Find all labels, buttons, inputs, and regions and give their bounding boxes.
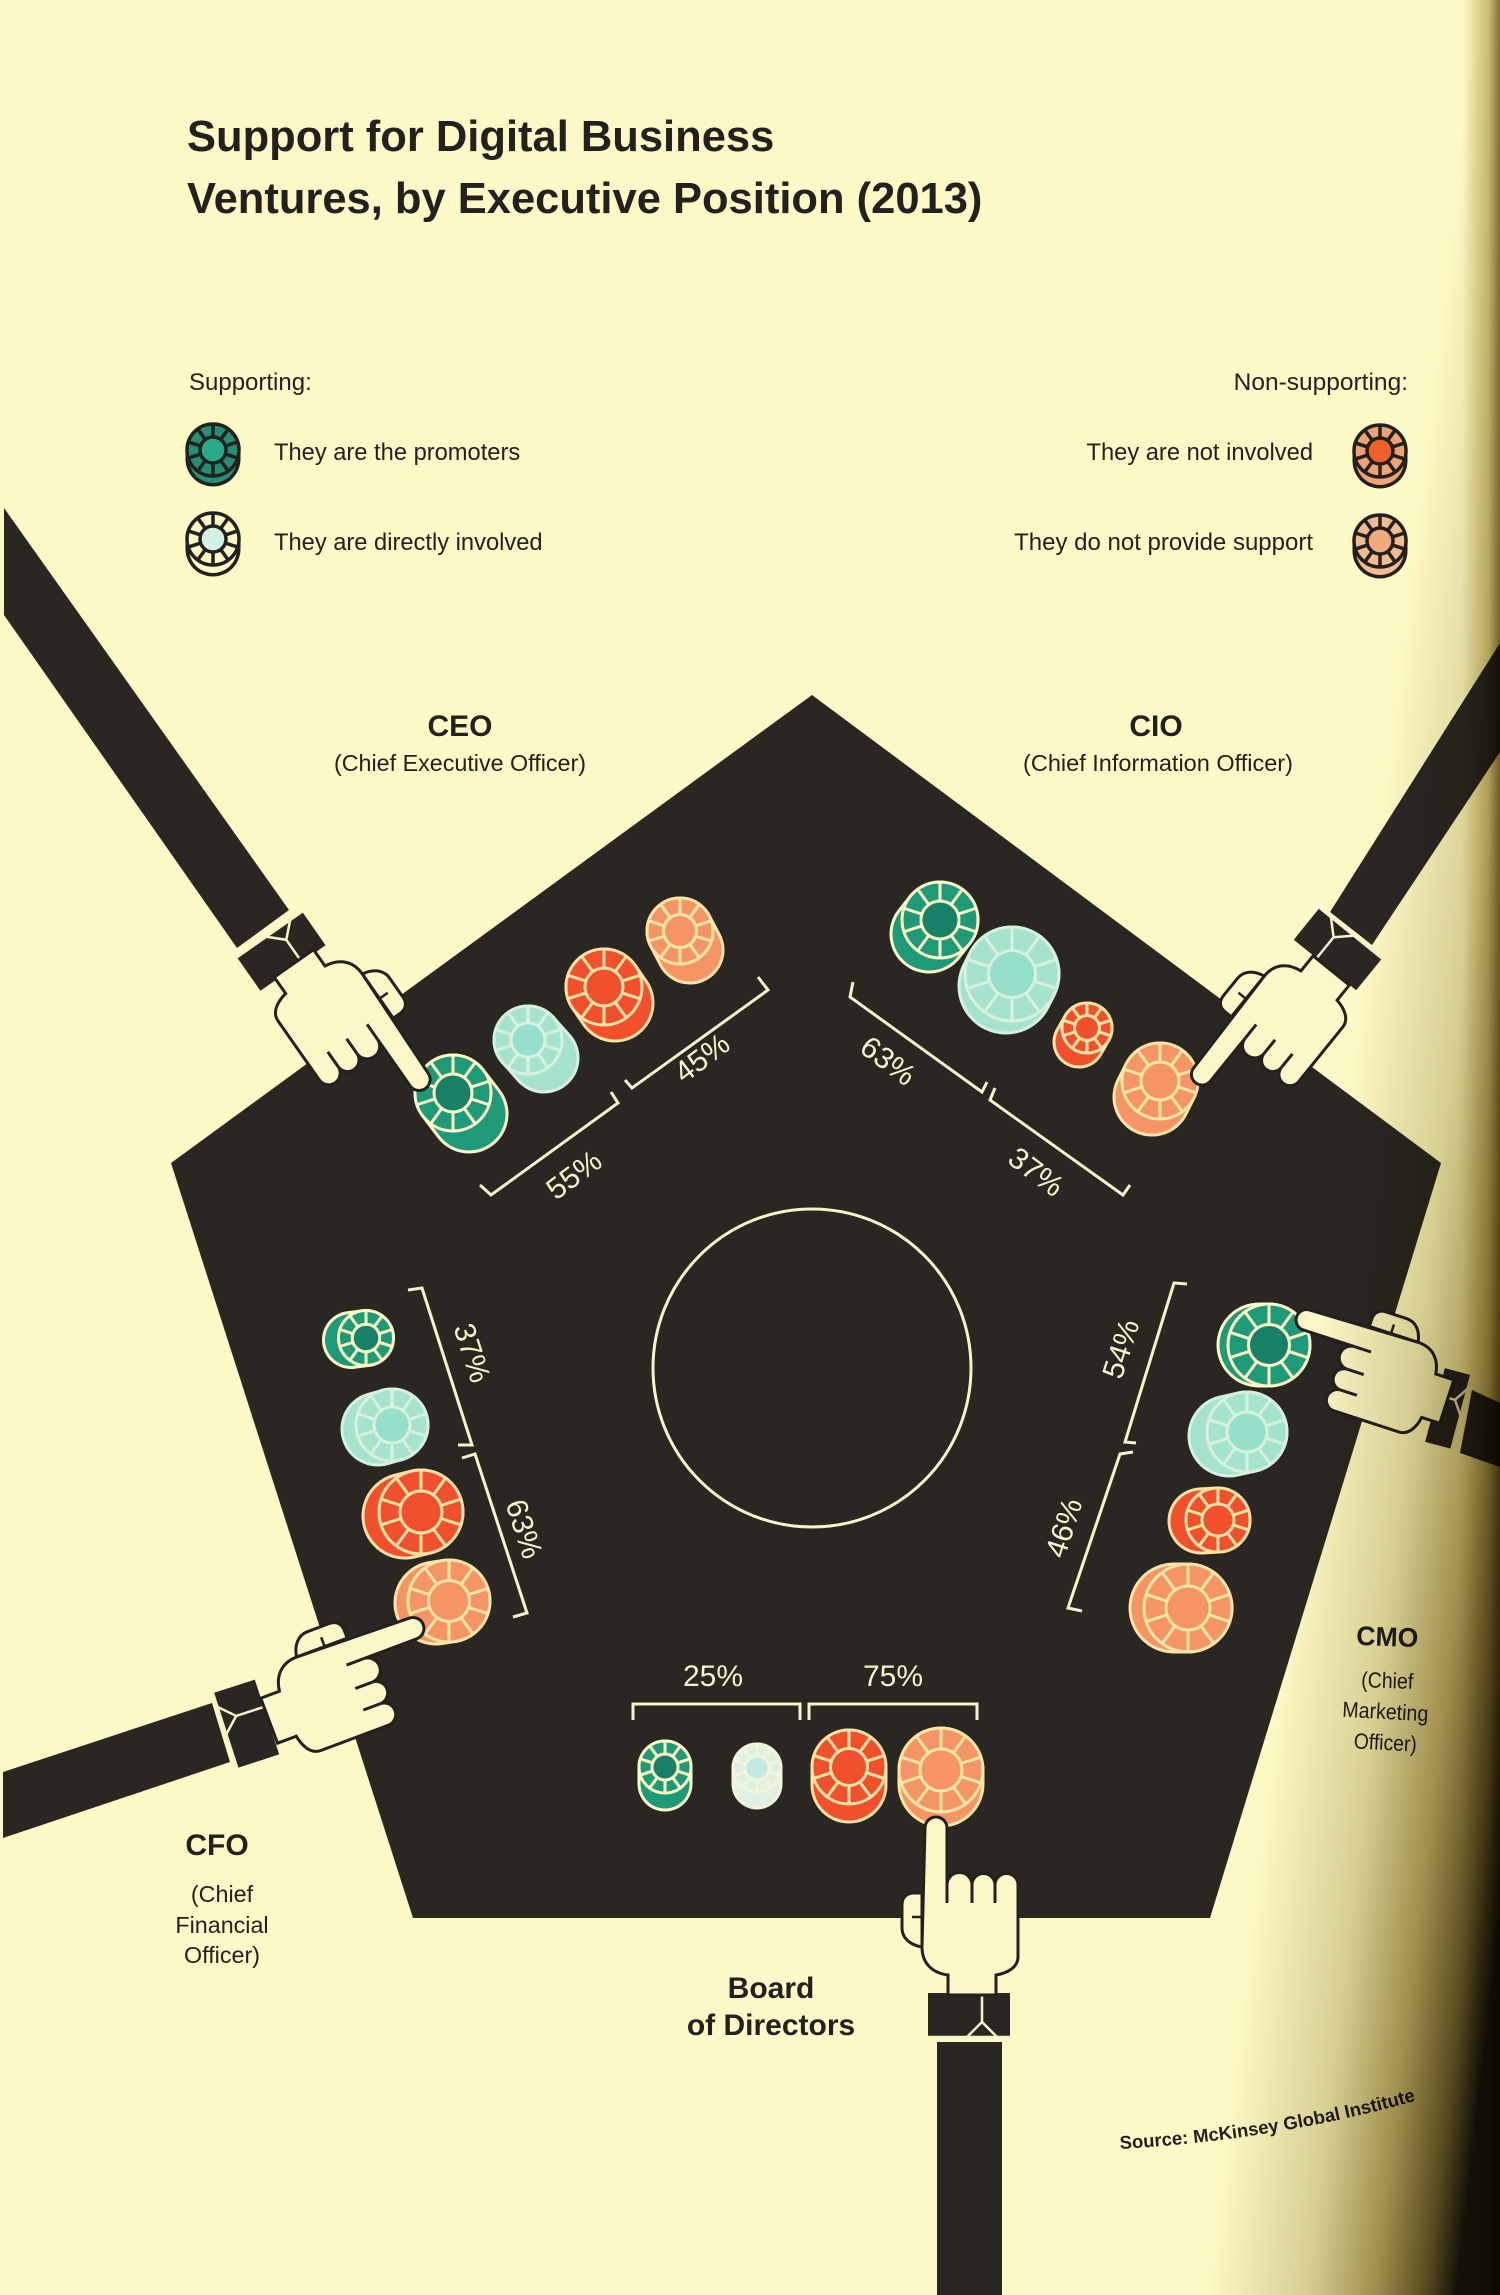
chip: CIO no support — [1122, 1043, 1198, 1119]
percent: CFO 63%: 63% — [499, 1496, 548, 1563]
arm: CMO — [1272, 1286, 1500, 1467]
legend label: not involved: They are not involved — [1087, 440, 1313, 466]
panel: CIO chips — [902, 882, 1198, 1119]
legend chip: directly involved — [187, 513, 239, 565]
panel: Board chips — [639, 1728, 983, 1812]
chip: Board no support — [899, 1728, 983, 1812]
label: CFO: CFO — [185, 1829, 249, 1862]
legend chip: not involved — [1354, 425, 1406, 477]
chip: CMO directly involved — [1207, 1392, 1287, 1472]
source note: Source: McKinsey Global Institute — [1120, 2092, 1414, 2149]
percent: Board 75%: 75% — [863, 1660, 923, 1693]
bracket: Board 25% — [633, 1704, 800, 1720]
percent: CEO 55%: 55% — [540, 1144, 608, 1207]
chip: CFO promoters — [338, 1310, 394, 1366]
pentagon table — [171, 695, 1441, 1918]
chip: CFO not involved — [379, 1470, 463, 1554]
title: Ventures, by Executive Position (2013) — [187, 175, 982, 223]
label: CFO: Officer) — [184, 1942, 260, 1968]
bracket: CFO 37% — [408, 1288, 472, 1445]
panel: CEO chips — [415, 898, 713, 1131]
page gutter shadow — [1200, 0, 1500, 2295]
label: CIO: (Chief Information Officer) — [1023, 750, 1293, 776]
title: Support for Digital Business — [187, 113, 774, 161]
chip: CMO no support — [1144, 1564, 1232, 1652]
bracket: CMO 54% — [1125, 1283, 1187, 1443]
chip: CIO promoters — [902, 882, 978, 958]
percent: CEO 45%: 45% — [668, 1027, 736, 1090]
chip: Board promoters — [639, 1741, 691, 1793]
label: CFO: (Chief — [191, 1881, 254, 1907]
chip: CIO not involved — [1062, 1003, 1112, 1053]
label: CEO — [334, 710, 586, 776]
percent: Board 25%: 25% — [683, 1660, 743, 1693]
arm: CEO — [4, 508, 453, 1136]
label: CMO — [1342, 1621, 1429, 1757]
legend label: no support: They do not provide support — [1014, 529, 1313, 556]
legend: non-supporting — [1014, 369, 1408, 567]
bracket: CIO 63% — [850, 982, 987, 1092]
label: CEO: CEO — [427, 710, 493, 743]
chip: CEO no support — [647, 898, 713, 964]
label: CMO: Officer) — [1353, 1728, 1418, 1757]
title — [187, 113, 982, 223]
bracket: CEO 55% — [480, 1092, 618, 1195]
label: CIO — [1023, 710, 1293, 776]
label: CEO: (Chief Executive Officer) — [334, 750, 586, 776]
arm: Board — [902, 1817, 1018, 2295]
label: Board of Directors: of Directors — [687, 2009, 855, 2042]
label: CMO: (Chief — [1361, 1667, 1414, 1694]
percent: CMO 54%: 54% — [1097, 1316, 1146, 1383]
legend heading: non-supporting: Non-supporting: — [1234, 369, 1408, 396]
bracket: CFO 63% — [462, 1454, 527, 1617]
label: Board of Directors: Board — [728, 1972, 814, 2005]
legend chip: promoters — [187, 424, 239, 476]
chip: CEO directly involved — [494, 1006, 562, 1074]
arm: CIO — [1170, 643, 1500, 1133]
chip: CFO directly involved — [356, 1389, 428, 1461]
label: CMO: Marketing — [1342, 1697, 1429, 1726]
legend label: promoters: They are the promoters — [274, 440, 520, 466]
percent: CFO 37%: 37% — [447, 1320, 496, 1387]
label: CMO: CMO — [1356, 1621, 1419, 1653]
label: Board of Directors — [687, 1972, 855, 2042]
centre circle — [653, 1209, 971, 1527]
label: CFO: Financial — [175, 1912, 269, 1938]
chip: CIO directly involved — [965, 927, 1059, 1021]
legend heading: supporting: Supporting: — [189, 369, 312, 396]
legend: supporting — [187, 369, 543, 565]
percent: CIO 63%: 63% — [854, 1030, 922, 1093]
panel: CFO chips — [338, 1310, 490, 1642]
chip: Board directly involved — [733, 1744, 781, 1792]
chip: CEO promoters — [415, 1055, 491, 1131]
bracket: CMO 46% — [1068, 1452, 1133, 1611]
legend chip: no support — [1354, 515, 1406, 567]
percent: CIO 37%: 37% — [1002, 1141, 1070, 1204]
chip: CFO no support — [408, 1560, 490, 1642]
percent: CMO 46%: 46% — [1040, 1495, 1089, 1562]
panel: CMO chips — [1144, 1304, 1310, 1652]
bracket: Board 75% — [809, 1704, 977, 1720]
chip: CMO promoters — [1228, 1304, 1310, 1386]
bracket: CEO 45% — [625, 977, 768, 1088]
legend label: directly involved: They are directly involved — [274, 530, 543, 556]
label: CFO — [175, 1829, 269, 1968]
bracket: CIO 37% — [990, 1088, 1130, 1195]
label: CIO: CIO — [1129, 710, 1183, 743]
chip: Board not involved — [812, 1730, 886, 1804]
arm: CFO — [3, 1593, 452, 1838]
chip: CMO not involved — [1186, 1488, 1250, 1552]
chip: CEO not involved — [566, 949, 642, 1025]
